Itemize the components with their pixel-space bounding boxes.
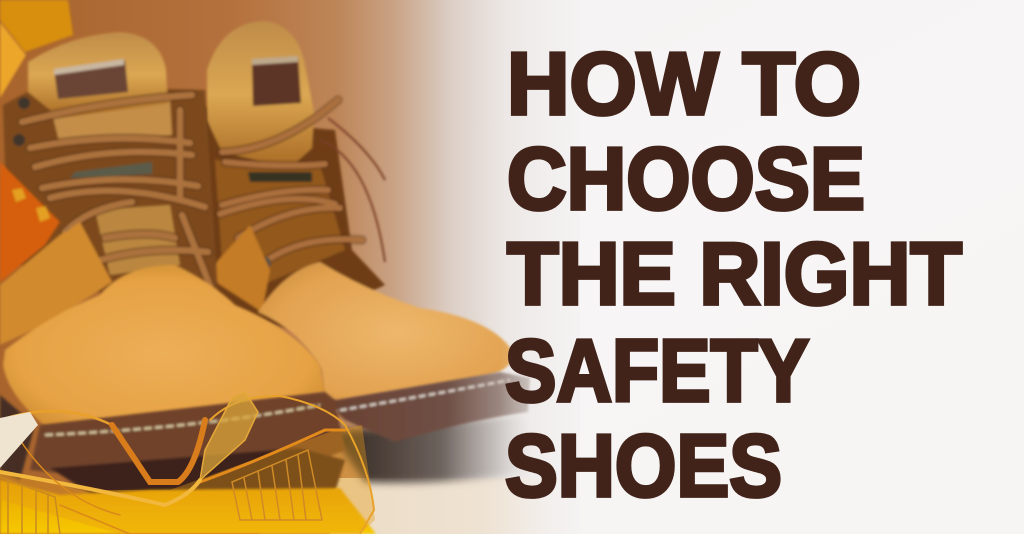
yellow floor reflection [0,480,376,534]
right boot shaft [195,100,385,330]
left boot shaft [3,85,218,300]
right boot laces [220,100,362,264]
title line 2: CHOOSE [507,129,865,228]
lens [0,425,375,534]
right boot eyelets [259,257,271,269]
ventilation slots left [0,477,60,534]
left boot laces [22,95,214,296]
left boot sole [0,392,345,500]
title line 5: SHOES [505,416,782,515]
title line 1: HOW TO [507,34,861,133]
left boot tag [54,60,128,99]
white glare [0,412,38,468]
title [505,34,962,515]
boot shadow [330,415,535,483]
left boot [0,32,325,426]
title line 3: THE RIGHT [507,224,962,323]
temple arms [0,411,150,480]
title line 4: SAFETY [505,321,809,420]
glove at top left [0,0,73,282]
photo: safety boots and glasses [0,0,580,534]
right boot toe [258,262,513,402]
right boot tag [252,57,301,106]
white fade over photo [500,0,580,534]
floor [330,478,580,534]
right boot ankle [205,225,270,312]
right boot sole [325,372,530,442]
right boot [195,21,513,402]
safety glasses [0,392,375,534]
ventilation slots right [232,450,322,520]
left boot toe [3,265,325,426]
left boot ankle leather [0,222,112,345]
